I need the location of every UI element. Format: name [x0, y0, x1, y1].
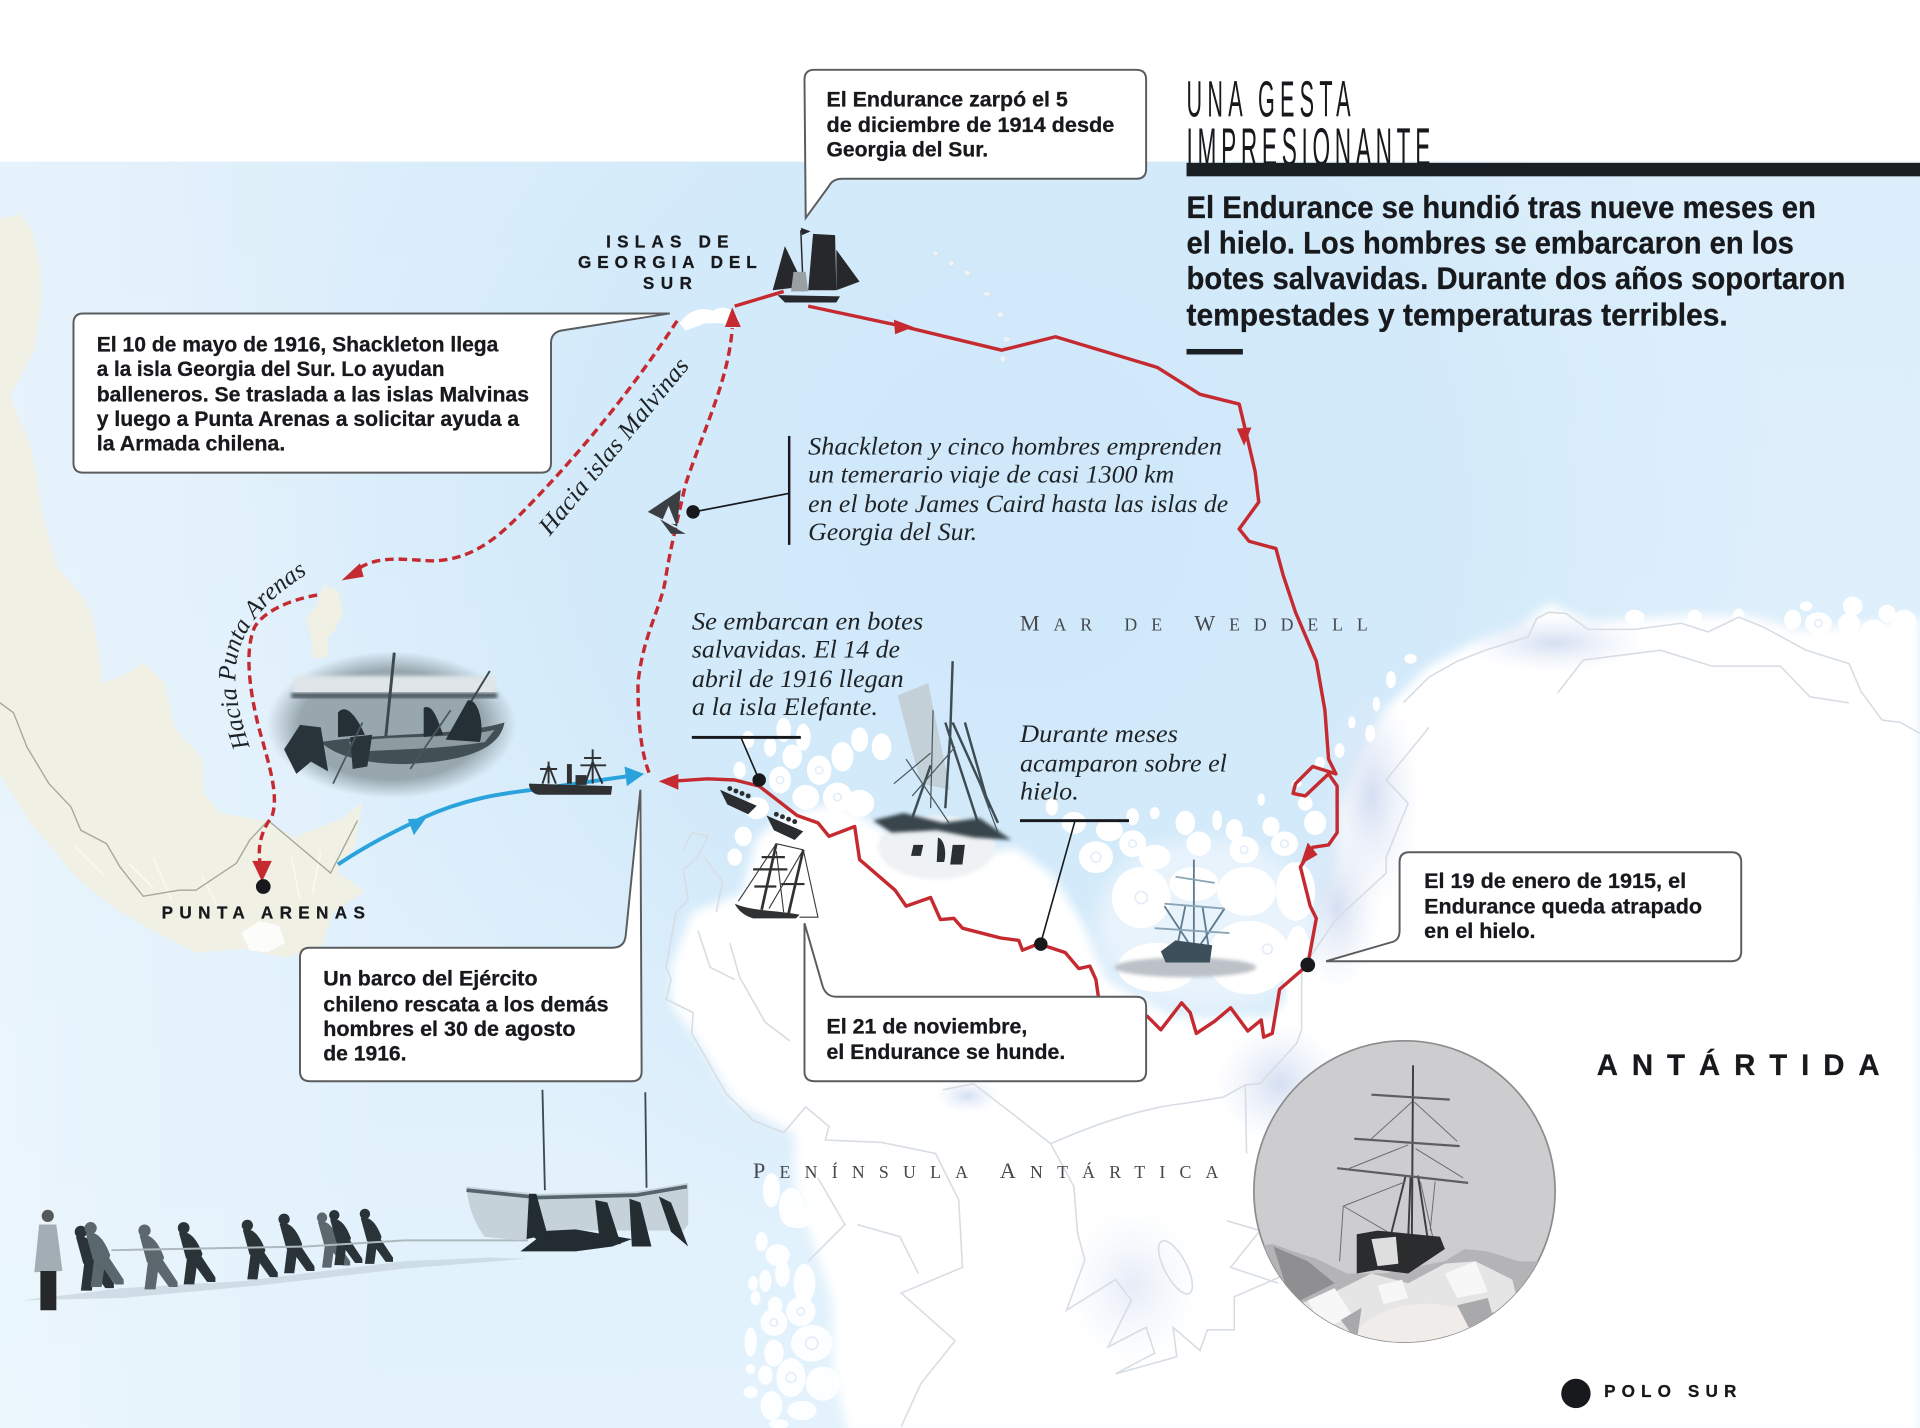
callout: Shackleton reaches South Georgia: y luego a Punta Arenas a solicitar ayuda a	[97, 408, 519, 431]
floe centres	[770, 620, 1822, 1382]
callout: Shackleton reaches South Georgia: a la isla Georgia del Sur. Lo ayudan	[97, 358, 444, 381]
route: blue rescue track	[338, 776, 627, 864]
routes	[249, 291, 1337, 1037]
intro paragraph: tempestades y temperaturas terribles.	[1187, 298, 1728, 333]
note: James Caird voyage: Georgia del Sur.	[808, 519, 977, 546]
note: lifeboats to Elephant Island	[692, 608, 923, 787]
Antarctica land and ice	[671, 604, 1920, 1428]
note: lifeboats to Elephant Island: abril de 1916 llegan	[692, 666, 904, 693]
icon: Endurance ship silhouette	[773, 228, 860, 302]
ice shadow	[22, 1258, 527, 1300]
icon: lifeboats	[720, 786, 803, 840]
label: Islas de Georgia del Sur: SUR	[643, 273, 692, 293]
label: Península Antártica: P ENÍNSULA A NTÁRTICA	[753, 1158, 1219, 1183]
photo: sinking ship on the ice	[873, 661, 1011, 879]
route: dashed to South Georgia	[638, 328, 732, 773]
callout: Shackleton reaches South Georgia	[73, 313, 670, 473]
icon: ship at Elephant Island	[735, 844, 818, 918]
note: James Caird voyage: en el bote James Caird hasta las islas de	[808, 491, 1228, 518]
callout: trapped in ice	[1326, 852, 1741, 961]
label: Hacia Punta Arenas: Hacia Punta Arenas	[218, 564, 306, 750]
note: camped on the ice: hielo.	[1020, 779, 1079, 806]
circular photo: Endurance in the ice	[1249, 1041, 1561, 1347]
route arrowheads	[252, 307, 1318, 882]
callout: Chilean rescue ship: hombres el 30 de agosto	[323, 1018, 576, 1041]
small South Sandwich islands	[932, 251, 1010, 362]
callout: Chilean rescue ship: chileno rescata a los demás	[323, 993, 609, 1016]
South Pole marker: POLO SUR	[1604, 1381, 1737, 1401]
label: Islas de Georgia del Sur: ISLAS DE	[606, 231, 729, 251]
title rule	[1187, 163, 1920, 176]
man-hauling photo	[22, 1090, 688, 1310]
callout: Endurance sinks: El 21 de noviembre,	[827, 1015, 1027, 1038]
title: UNA GESTA	[1187, 71, 1351, 128]
route: dashed to Falklands	[358, 321, 677, 569]
callout: Endurance sinks: el Endurance se hunde.	[827, 1041, 1065, 1064]
note: James Caird voyage	[686, 433, 1228, 546]
Punta Arenas marker	[256, 879, 271, 894]
intro paragraph: El Endurance se hundió tras nueve meses en	[1187, 190, 1816, 225]
callout: trapped in ice: en el hielo.	[1424, 920, 1536, 943]
note: camped on the ice: acamparon sobre el	[1020, 750, 1227, 777]
intro paragraph: el hielo. Los hombres se embarcaron en los	[1187, 225, 1794, 260]
icon: James Caird sailboat	[648, 490, 686, 534]
route: Endurance solid red track	[672, 291, 1337, 1037]
rope	[111, 1240, 528, 1250]
callout: Shackleton reaches South Georgia: balleneros. Se traslada a las islas Malvinas	[97, 384, 529, 407]
note: camped on the ice	[1019, 721, 1227, 951]
callout: Endurance sailed: El Endurance zarpó el 5	[827, 89, 1068, 112]
ice floes	[727, 596, 1916, 1009]
route: dashed to Punta Arenas	[249, 595, 317, 867]
callout: Shackleton reaches South Georgia: El 10 de mayo de 1916, Shackleton llega	[97, 333, 499, 356]
label: Punta Arenas: PUNTA ARENAS	[162, 902, 365, 922]
callout: Chilean rescue ship	[300, 790, 642, 1081]
note: James Caird voyage: un temerario viaje de casi 1300 km	[808, 461, 1174, 488]
note: James Caird voyage: Shackleton y cinco hombres emprenden	[808, 433, 1222, 460]
lifeboat on sledge	[467, 1090, 688, 1251]
marker: trapped point	[1300, 958, 1315, 972]
title	[1187, 71, 1430, 177]
intro paragraph: botes salvavidas. Durante dos años soportaron	[1187, 261, 1845, 296]
label: Mar de Weddell: M AR DE W EDDELL	[1020, 611, 1368, 636]
hauling men	[75, 1209, 393, 1291]
note: camped on the ice: Durante meses	[1019, 721, 1178, 748]
callout: Endurance sailed: Georgia del Sur.	[827, 139, 988, 162]
western ice floes	[743, 1173, 840, 1428]
icon: rescue ship	[529, 749, 612, 795]
callout: trapped in ice: El 19 de enero de 1915, el	[1424, 870, 1686, 893]
callout: trapped in ice: Endurance queda atrapado	[1424, 895, 1702, 918]
label: Hacia islas Malvinas: Hacia islas Malvinas	[533, 353, 695, 541]
intro paragraph	[1187, 190, 1845, 333]
note: lifeboats to Elephant Island: Se embarcan en botes	[692, 608, 923, 635]
label: Antártida: ANTÁRTIDA	[1597, 1048, 1880, 1082]
callout: Endurance sailed	[804, 70, 1146, 218]
South Pole marker	[1561, 1379, 1737, 1408]
callout: Chilean rescue ship: Un barco del Ejército	[323, 968, 538, 991]
coastline outlines	[666, 612, 1920, 1427]
standing man	[34, 1210, 62, 1310]
paragraph end bar	[1187, 349, 1243, 354]
photo: boat at the shore	[267, 651, 517, 798]
label: Islas de Georgia del Sur: GEORGIA DEL	[578, 252, 757, 272]
title: IMPRESIONANTE	[1187, 117, 1430, 177]
note: lifeboats to Elephant Island: salvavidas. El 14 de	[692, 637, 900, 664]
callout: Endurance sailed: de diciembre de 1914 desde	[827, 114, 1114, 137]
callout: Chilean rescue ship: de 1916.	[323, 1042, 407, 1065]
label: Islas de Georgia del Sur	[578, 231, 757, 293]
callout: Shackleton reaches South Georgia: la Armada chilena.	[97, 433, 285, 456]
callout: Endurance sinks	[804, 923, 1146, 1081]
photo: ship trapped in the ice	[1114, 860, 1256, 977]
note: lifeboats to Elephant Island: a la isla Elefante.	[692, 694, 878, 721]
South America land	[0, 214, 365, 958]
South Georgia island	[680, 308, 740, 331]
